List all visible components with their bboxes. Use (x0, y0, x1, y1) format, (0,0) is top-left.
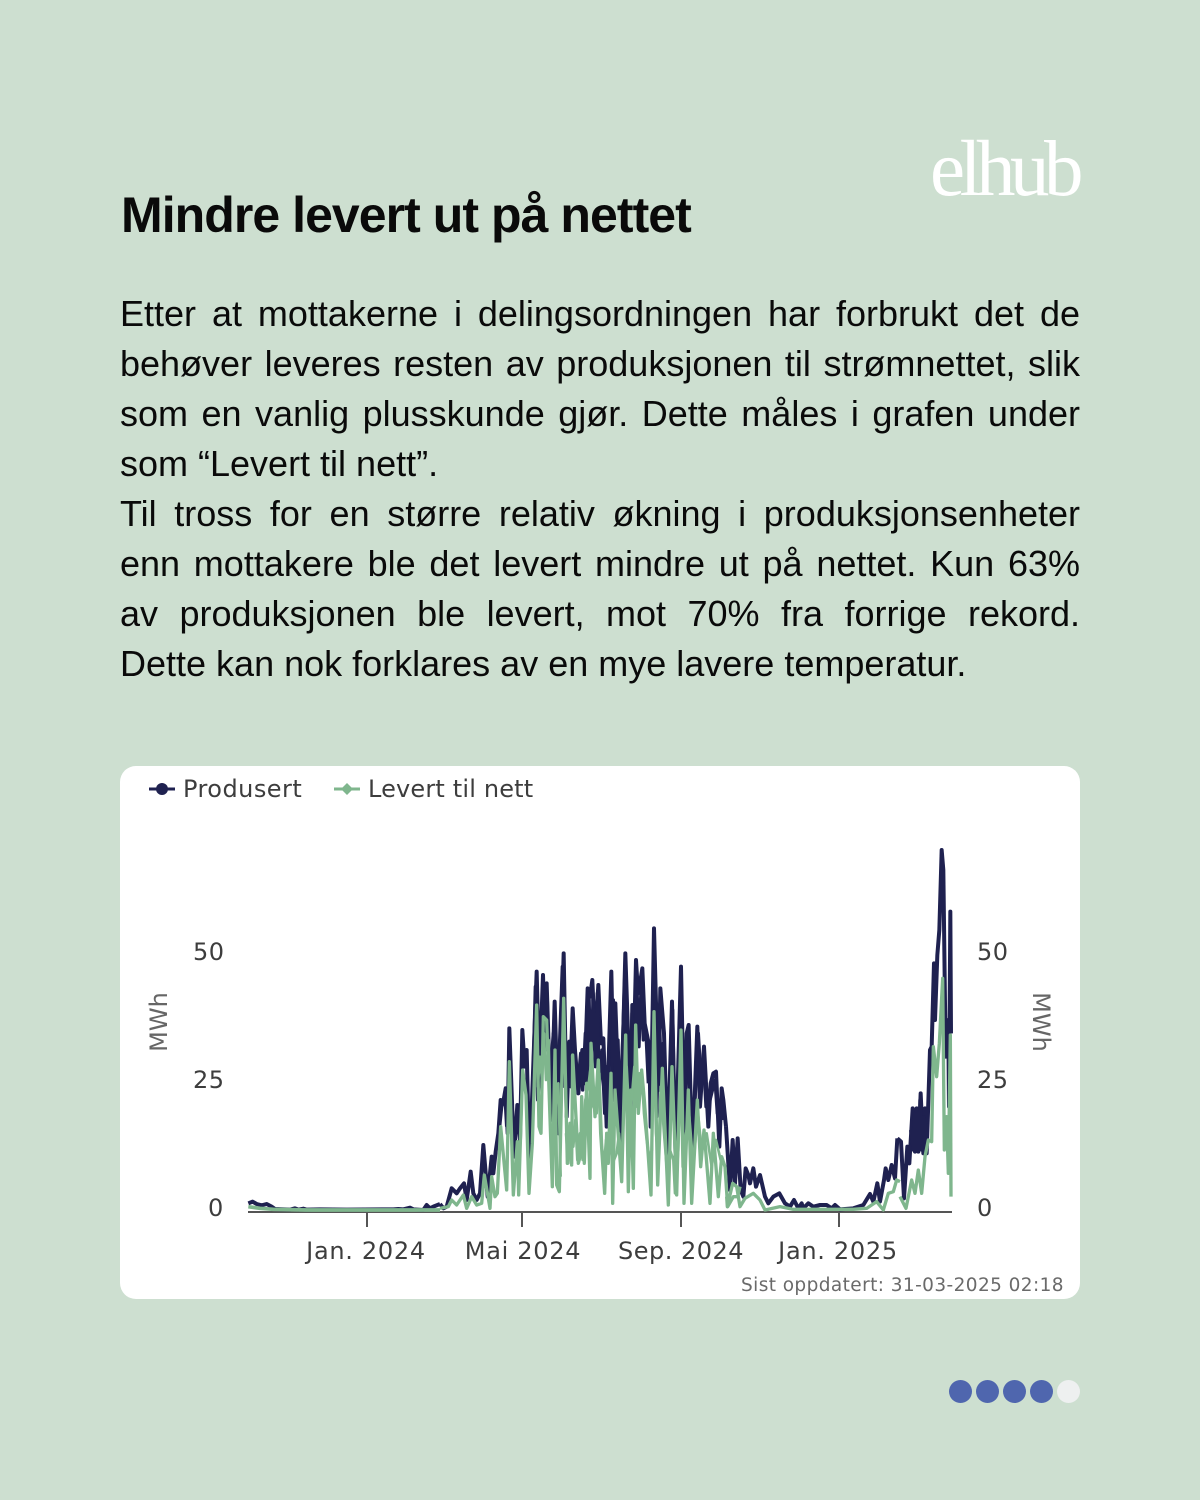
x axis line and ticks (248, 1212, 952, 1227)
body text: behøver leveres resten av produksjonen til strømnettet, slik (120, 343, 1080, 384)
right y axis labels (977, 938, 1009, 1222)
panel: line chart card (120, 766, 1080, 1299)
body text: Til tross for en større relativ økning i produksjonsenheter (120, 493, 1080, 534)
x axis labels: Mai 2024 (465, 1237, 581, 1265)
line series: Levert til nett (248, 978, 951, 1210)
left y axis labels: 25 (193, 1066, 225, 1094)
left y axis labels (193, 938, 225, 1222)
title: Mindre levert ut på nettet (121, 187, 691, 243)
body text: som en vanlig plusskunde gjør. Dette måles i grafen under (120, 393, 1080, 434)
right y axis labels: 25 (977, 1066, 1009, 1094)
body text: Dette kan nok forklares av en mye lavere temperatur. (120, 643, 966, 684)
legend (149, 775, 533, 803)
left y axis labels: 50 (193, 938, 225, 966)
x axis labels: Jan. 2024 (304, 1237, 426, 1265)
right axis title: MWh (1027, 992, 1055, 1052)
x axis labels: Sep. 2024 (618, 1237, 744, 1265)
left y axis labels: 0 (208, 1194, 223, 1222)
body text: av produksjonen ble levert, mot 70% fra forrige rekord. (120, 593, 1080, 634)
left axis title: MWh (145, 992, 173, 1052)
logo: elhub: elhub (930, 126, 1078, 213)
legend: Produsert (183, 775, 302, 803)
pagination dots (949, 1380, 1080, 1403)
body text (120, 293, 1080, 684)
right y axis labels: 50 (977, 938, 1009, 966)
x axis labels: Jan. 2025 (776, 1237, 898, 1265)
last updated note: Sist oppdatert: 31-03-2025 02:18 (741, 1275, 1064, 1296)
body text: som “Levert til nett”. (120, 443, 438, 484)
body text: enn mottakere ble det levert mindre ut på nettet. Kun 63% (120, 543, 1080, 584)
x axis labels (304, 1237, 898, 1265)
legend: Levert til nett (368, 775, 533, 803)
right y axis labels: 0 (977, 1194, 992, 1222)
body text: Etter at mottakerne i delingsordningen har forbrukt det de (120, 293, 1080, 334)
line series: Produsert (248, 850, 951, 1210)
